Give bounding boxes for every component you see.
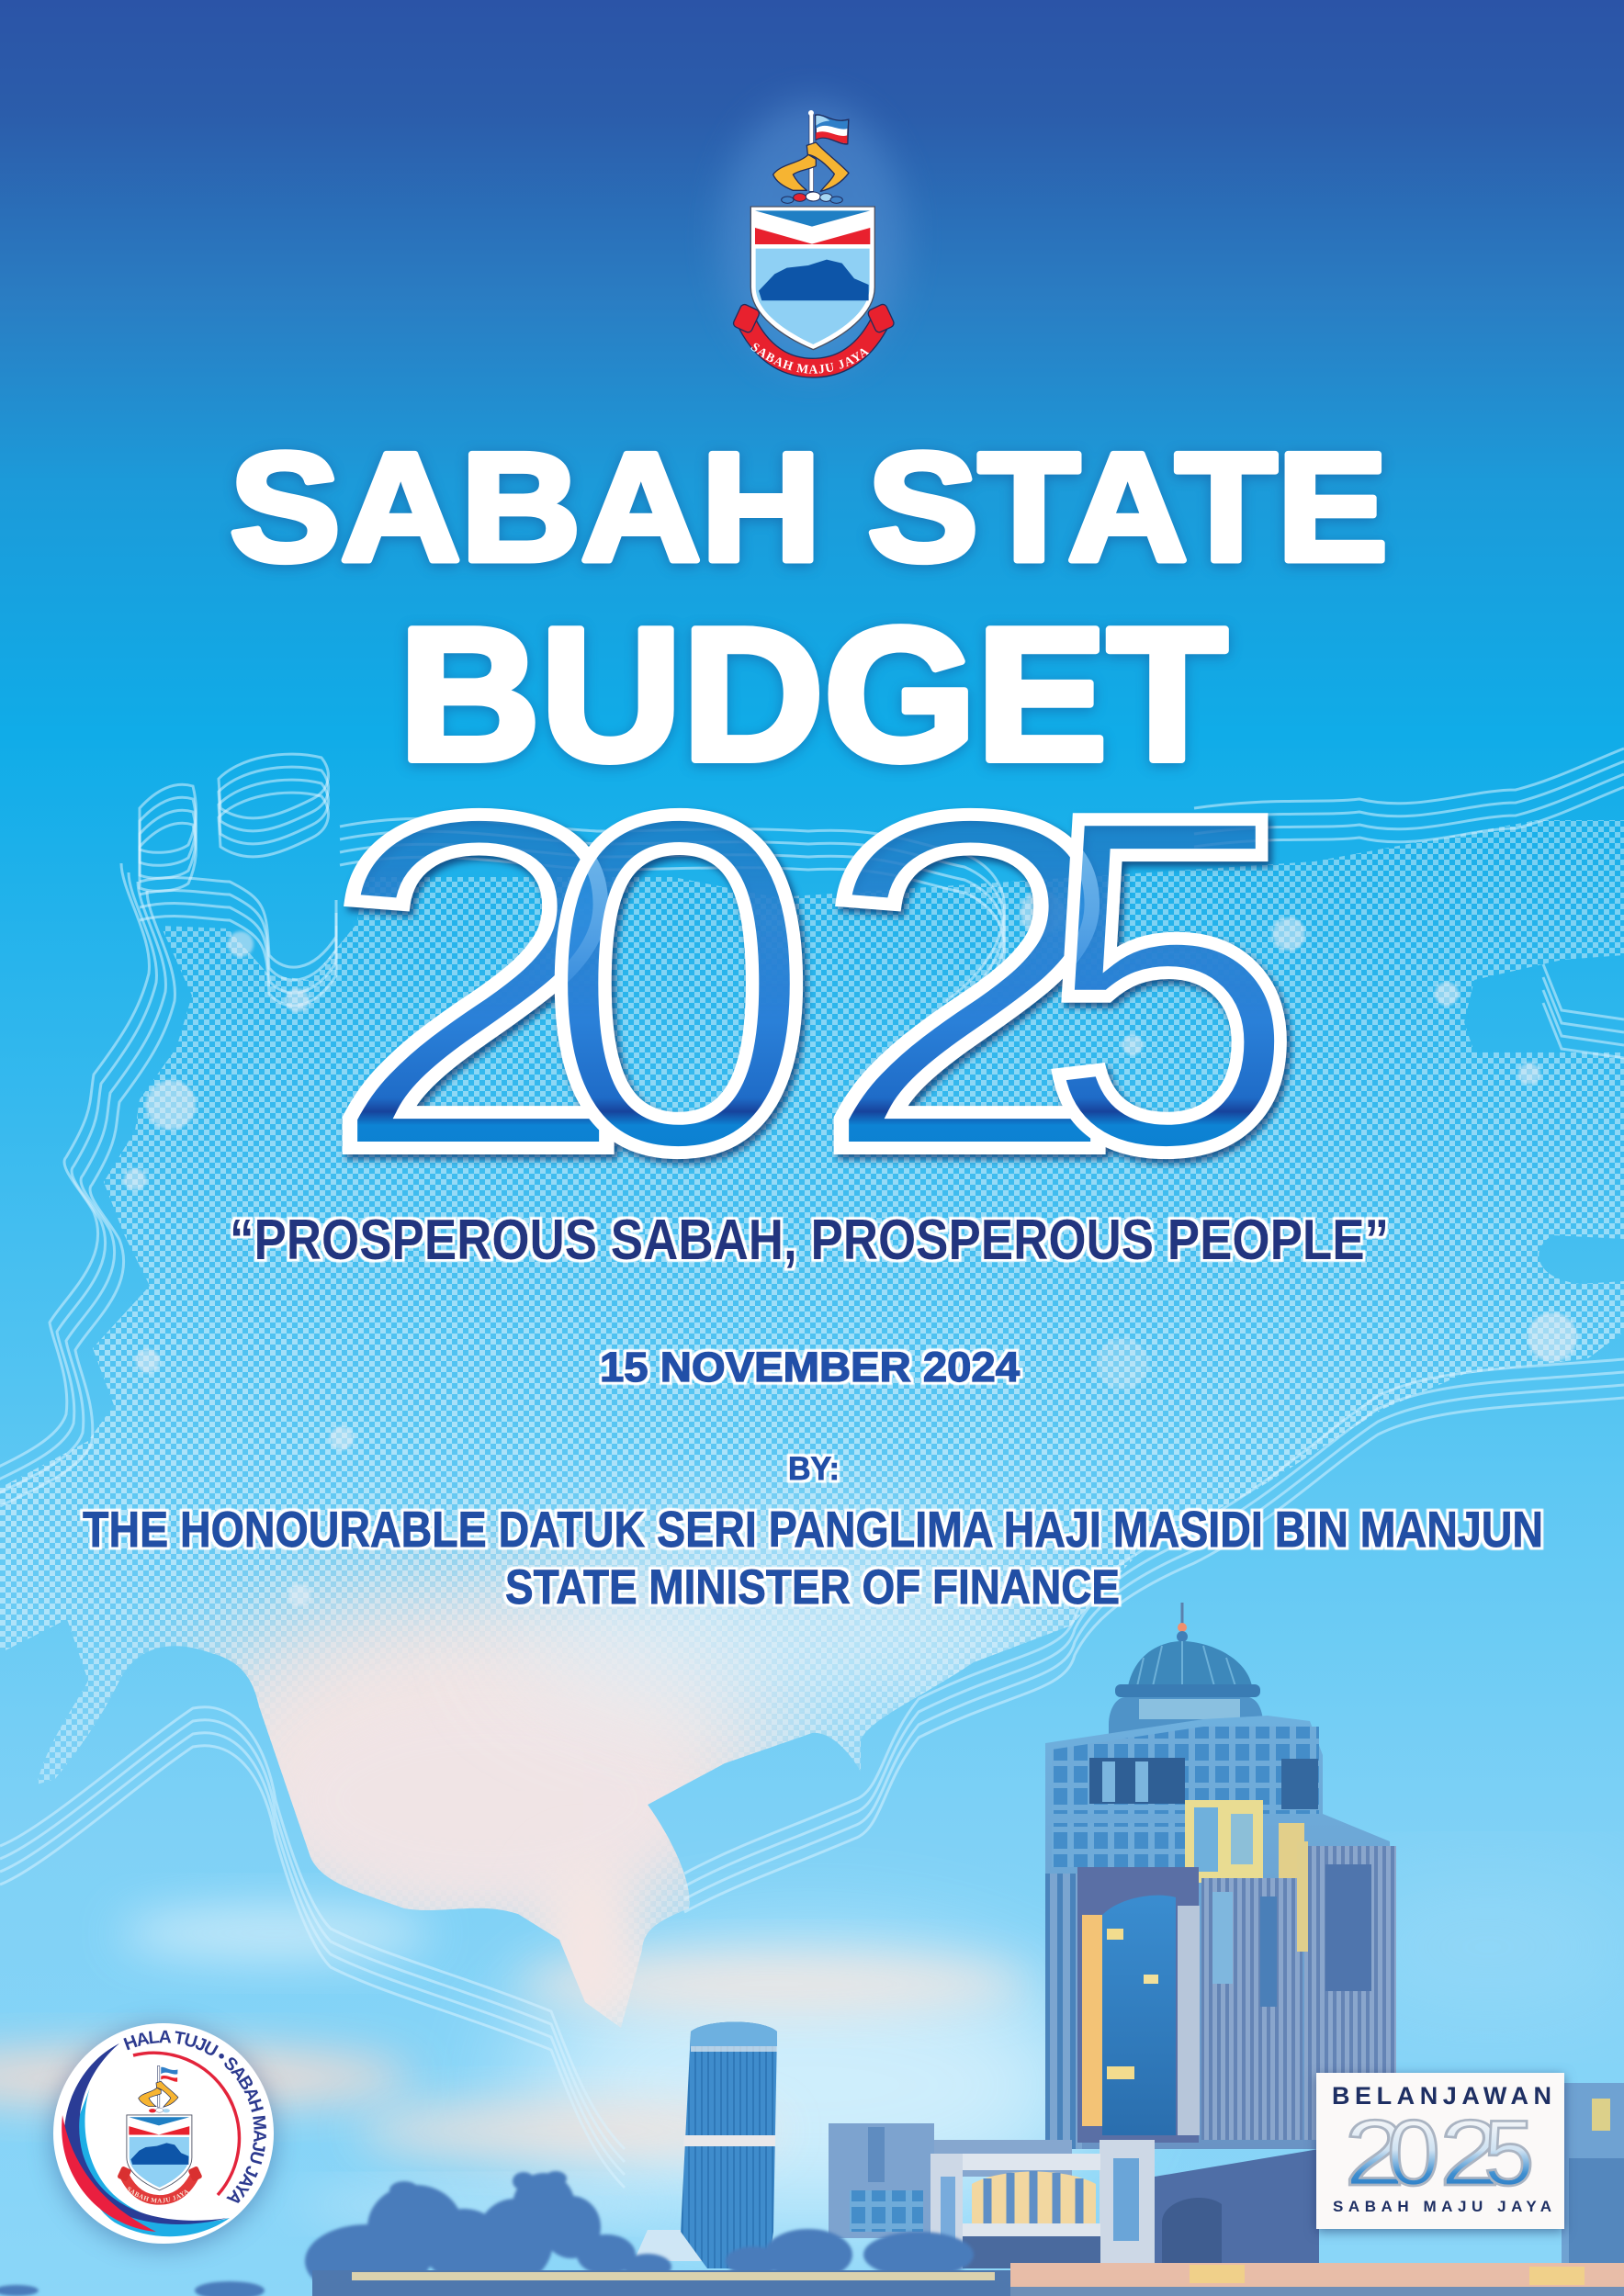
- minister title: STATE MINISTER OF FINANCE: [505, 1560, 1120, 1615]
- card year: 0: [1387, 2100, 1440, 2204]
- card year: 2: [1439, 2101, 1500, 2205]
- main tower: domed State Administrative Centre: [1045, 1603, 1398, 2149]
- card year: 5: [1483, 2102, 1534, 2205]
- card year: 2: [1344, 2101, 1405, 2205]
- flag: [816, 115, 849, 144]
- dark recess: [1077, 1867, 1199, 2143]
- card motto: SABAH MAJU JAYA: [1333, 2198, 1551, 2215]
- by label: BY:: [788, 1451, 840, 1487]
- arms: [773, 142, 849, 191]
- red arc: [133, 2053, 239, 2195]
- flag pole: [808, 110, 814, 191]
- big year 2025: 0: [542, 715, 816, 1249]
- shield: [750, 207, 874, 350]
- slogan: “PROSPEROUS SABAH, PROSPEROUS PEOPLE”: [230, 1209, 1389, 1272]
- big year 2025: 2: [321, 715, 635, 1250]
- ribbon with motto: [733, 303, 895, 378]
- map glow nodes: [124, 891, 1577, 1606]
- big year 2025: 2: [813, 715, 1126, 1250]
- warm lit section: [1185, 1800, 1304, 1924]
- map contour lines: [0, 748, 1624, 2188]
- right wing: [1201, 1841, 1396, 2140]
- podium buildings: [829, 2083, 1624, 2268]
- card year: [1345, 2100, 1534, 2205]
- card heading: BELANJAWAN: [1332, 2082, 1551, 2110]
- wreath: [782, 192, 842, 203]
- curved glass tower: [1102, 1896, 1200, 2135]
- title: BUDGET: BUDGET: [399, 589, 1227, 800]
- upper windows: [1052, 1727, 1319, 1867]
- trees and waterfront: [0, 2171, 1624, 2296]
- big year 2025: [321, 715, 1300, 1250]
- tower body: [1045, 1716, 1398, 2149]
- logo card: Belanjawan 2025: [1316, 2073, 1564, 2229]
- badge crest: [118, 2065, 202, 2205]
- ribbon with motto: SABAH MAJU JAYA: [751, 343, 869, 374]
- big year 2025: 5: [1040, 716, 1300, 1250]
- orange column: [1082, 1915, 1104, 2126]
- crest: Sabah coat of arms: [715, 96, 911, 378]
- badge motto: HALA TUJU • SABAH MAJU JAYA: [123, 2030, 266, 2203]
- date: 15 NOVEMBER 2024: [600, 1344, 1020, 1390]
- badge: Hala Tuju Sabah Maju Jaya: [39, 2013, 288, 2261]
- badge crest: SABAH MAJU JAYA: [127, 2187, 189, 2202]
- left wing: [1045, 1874, 1082, 2149]
- clouds: [0, 1883, 1624, 2223]
- map of Sabah: halftone land: [0, 820, 1624, 2028]
- left round tower: [634, 2022, 777, 2268]
- spire and dome: [1109, 1603, 1264, 1736]
- crescent swoosh: [62, 2043, 230, 2236]
- title: SABAH STATE: SABAH STATE: [230, 421, 1388, 593]
